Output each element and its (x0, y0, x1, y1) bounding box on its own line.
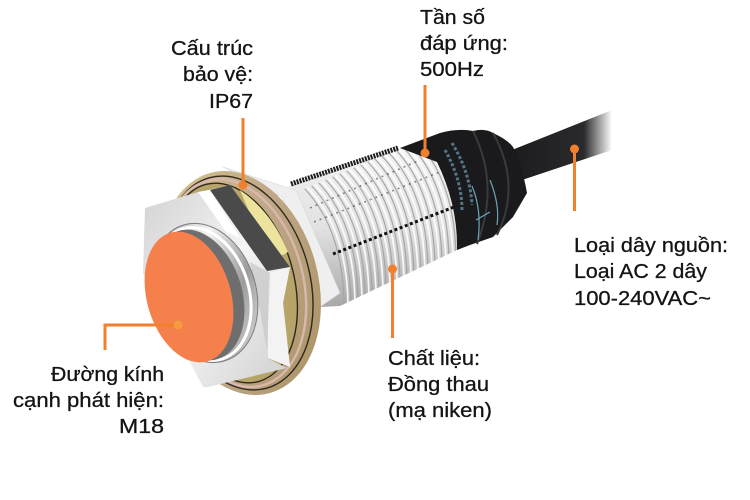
callout: sensing diameter: M18 (119, 415, 164, 438)
callout: material: (mạ niken) (388, 399, 492, 422)
callout: protection structure: Cấu trúc (171, 37, 253, 60)
rear hex collar (223, 167, 340, 307)
callout: response frequency: 500Hz (420, 58, 484, 81)
callout: response frequency: Tần số (420, 6, 485, 29)
sensor product photo (130, 110, 612, 413)
callout: response frequency: đáp ứng: (420, 32, 508, 55)
washers (135, 153, 345, 413)
orange sensor face (130, 221, 248, 373)
threaded neck (134, 210, 274, 376)
callout: material: Chất liệu: (388, 347, 480, 370)
callout: cable type: Loại AC 2 dây (574, 260, 708, 283)
callout: protection structure: IP67 (209, 90, 253, 113)
callout: response frequency (420, 6, 508, 158)
callout: cable type: Loại dây nguồn: (574, 234, 728, 257)
power cable (512, 110, 612, 180)
callout: protection structure: bảo vệ: (183, 63, 253, 86)
callout: material: Đồng thau (388, 373, 489, 396)
callout: cable type (570, 144, 728, 310)
callout: cable type: 100-240VAC~ (574, 287, 711, 310)
black rear housing (400, 130, 527, 250)
callout: sensing diameter (13, 320, 182, 438)
callout: protection structure (171, 37, 253, 190)
callout: sensing diameter: Đường kính (51, 363, 164, 386)
hex nut (143, 185, 290, 387)
threaded body (288, 146, 457, 307)
callout: sensing diameter: cạnh phát hiện: (13, 389, 164, 412)
callout: material (388, 264, 492, 422)
